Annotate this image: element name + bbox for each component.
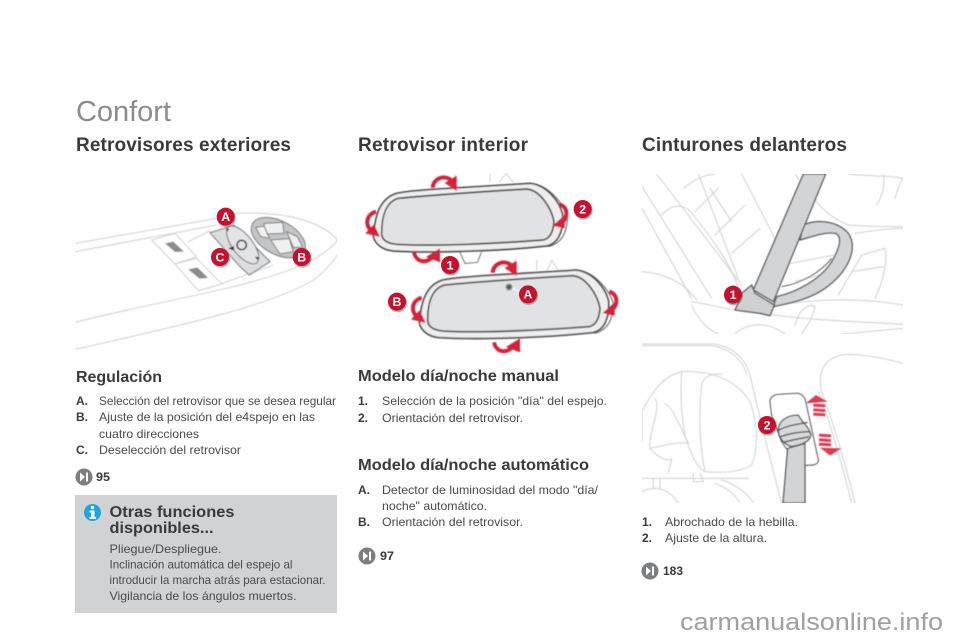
panel heading: disponibles... [110,520,214,537]
column 3 list [642,515,798,545]
mirror stem [460,252,481,263]
illustration: seat belt buckle [642,174,903,334]
panel text: Pliegue/Despliegue. [110,542,222,556]
heading: retrovisores exteriores: Retrovisores exteriores [76,135,291,156]
column 1 list: Selección del retrovisor que se desea regular [99,394,336,408]
column 2 list: manual: Selección de la posición "día" del espejo. [382,394,607,408]
column 1 list: B. [76,410,88,424]
panel text: introducir la marcha atrás para estacionar. [110,573,326,587]
badge 2: 2 [579,202,586,216]
panel text: Vigilancia de los ángulos muertos. [110,589,296,603]
guide clip [778,415,811,447]
badge 1: 1 [730,288,737,302]
badge A: A [524,288,533,302]
illustration: interior rear-view mirrors [365,174,616,352]
badge C [211,248,230,268]
buckle [735,285,774,316]
page reference 95: 95 [96,470,110,484]
column 1 list: Deselección del retrovisor [99,443,241,457]
watermark: carmanualsonline.info [680,609,943,636]
page reference 95 [76,468,110,486]
lower mirror [419,270,613,339]
panel: otras funciones [75,495,337,613]
heading: cinturones delanteros: Cinturones delanteros [642,135,847,156]
mirror joystick [245,209,312,266]
arrows upper mirror [365,176,566,262]
badge B [388,293,407,312]
panel heading: Otras funciones [110,504,235,521]
badge 2 [758,416,777,436]
column 2 subheading: manual: Modelo día/noche manual [358,368,559,385]
sensor A [506,284,521,292]
panel text: Inclinación automática del espejo al [110,558,292,572]
column 2 list: automatic: Orientación del retrovisor. [382,515,523,529]
illustration: door mirror controls [75,208,337,349]
column 1 list: C. [76,443,88,457]
belt strap [753,174,826,302]
column 2 list: manual [358,394,607,425]
mirror selector switch [210,221,270,275]
column 1 list: A. [76,394,88,408]
column 1 list: Ajuste de la posición del e4spejo en las [99,410,315,424]
panel heading [110,504,235,537]
badge B: B [297,250,306,264]
column 3 list: Abrochado de la hebilla. [665,515,798,529]
column 2 subheading: automatic: Modelo día/noche automático [358,457,589,474]
column 2 list: automatic: Detector de luminosidad del modo "día/ [382,483,599,497]
belt strap [783,443,805,503]
upper mirror [373,183,567,252]
badge C: C [216,250,225,264]
icon: info [84,504,101,521]
column 2 list: automatic: noche" automático. [382,499,487,513]
heading: retrovisor interior: Retrovisor interior [358,135,529,156]
column 1 list: cuatro direcciones [99,427,199,441]
page reference 183 [642,562,683,580]
column 2 list: manual: Orientación del retrovisor. [382,411,523,425]
page reference 97 [358,548,394,564]
column 3 list: 1. [642,515,652,529]
column 2 list: manual: 1. [358,394,368,408]
column 2 list: automatic: A. [358,483,370,497]
badge 1 [724,286,743,305]
badge 2 [574,200,593,220]
column 2 list: automatic [358,483,599,529]
column 2 list: manual: 2. [358,411,368,425]
page reference 183: 183 [663,564,683,578]
column 1 subheading: Regulación [76,369,162,386]
arrows lower mirror [411,261,616,352]
badge 1 [441,256,460,276]
adjuster plate [770,393,818,466]
badge 1: 1 [447,258,454,272]
badge A [217,208,236,227]
column 1 list [76,394,336,457]
badge A [519,285,538,305]
illustration: belt height adjuster [642,344,903,503]
column 3 list: 2. [642,531,652,545]
panel text [110,542,326,603]
column 3 list: Ajuste de la altura. [665,531,767,545]
page reference 97: 97 [380,549,394,563]
column 2 list: automatic: B. [358,515,370,529]
badge B: B [393,295,402,309]
badge 2: 2 [764,418,771,432]
badge B [293,248,312,268]
badge A: A [221,210,230,224]
title: Confort [76,96,171,128]
belt loop [773,222,852,307]
arrows up and down [806,395,842,456]
